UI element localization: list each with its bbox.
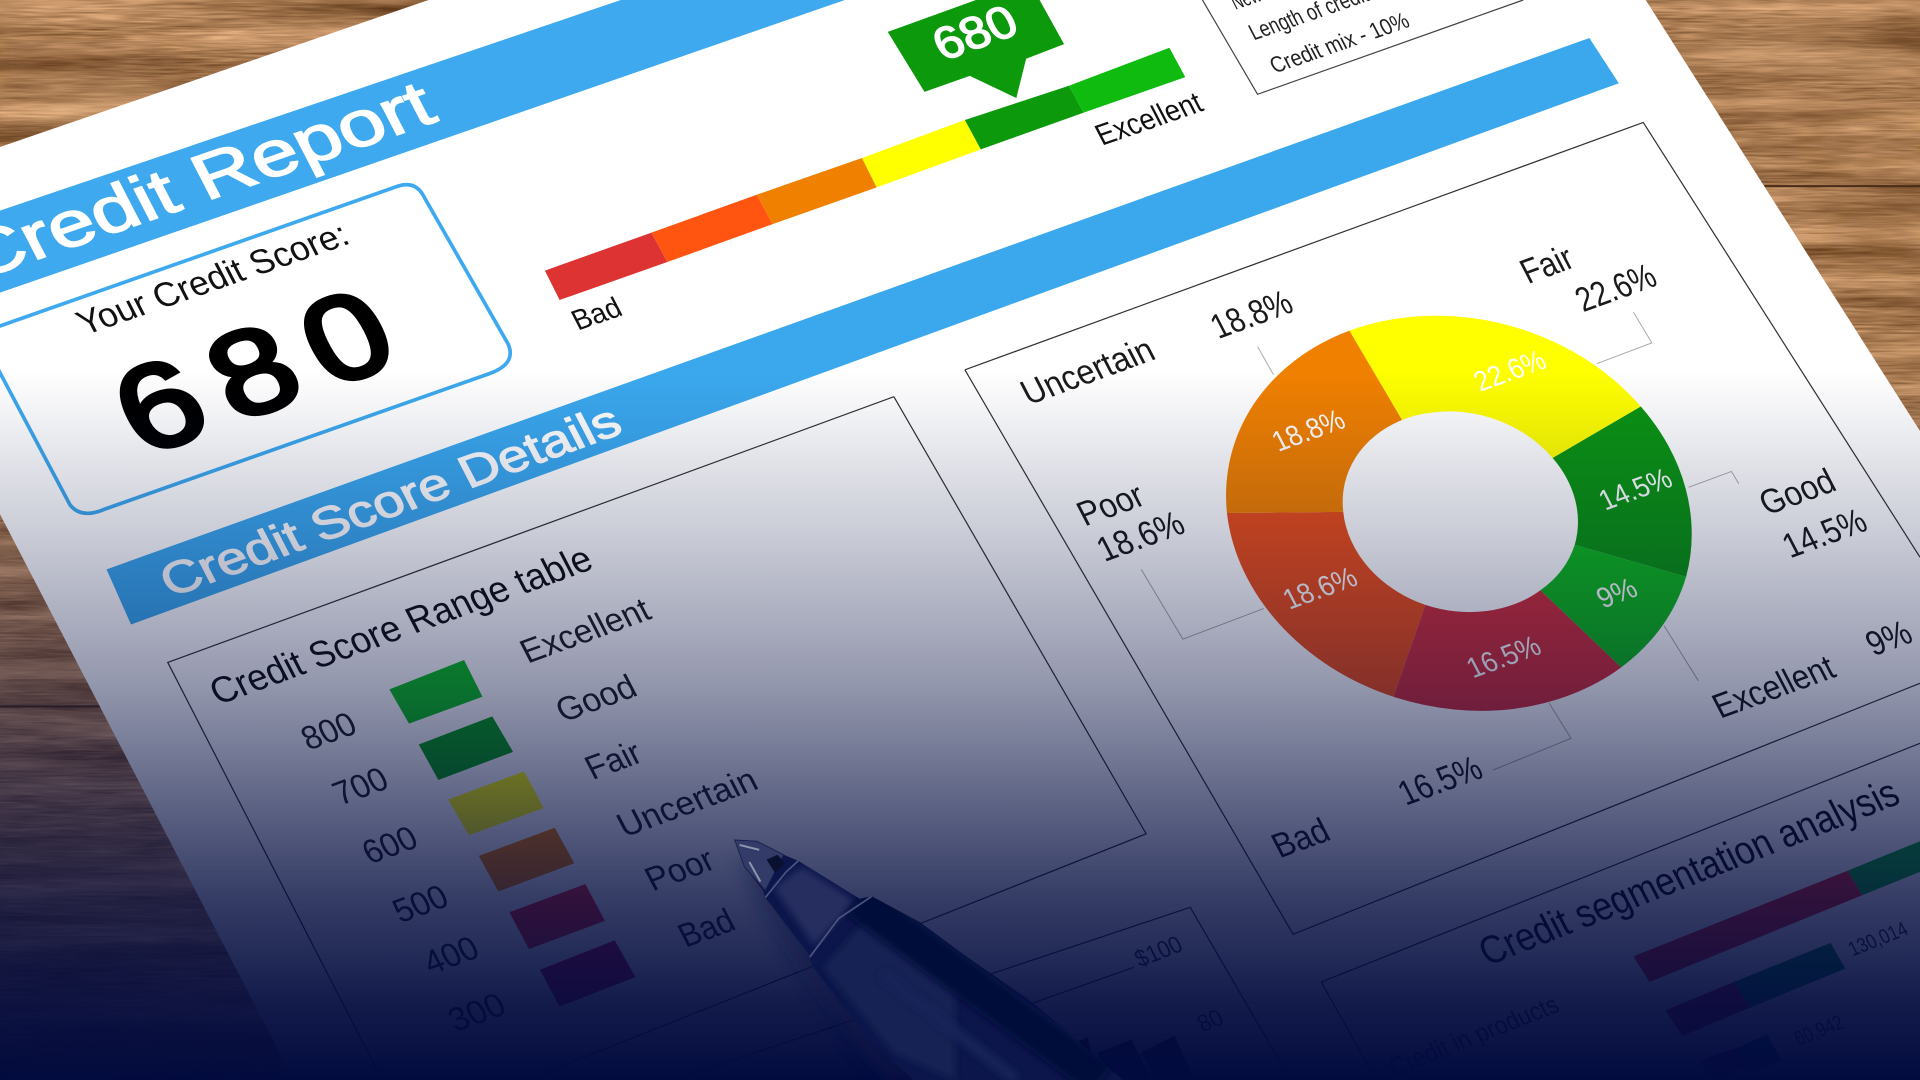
pen body [735,840,1123,1080]
row: 600 fair: Fair [579,734,648,787]
row: 400 poor: 400 [417,930,485,982]
gauge label: bad: Bad [566,291,627,337]
value 60,942: 60,942 [1791,1011,1848,1050]
panel: bar chart (partly hidden) [673,907,1291,1080]
panel: donut chart [965,122,1920,934]
donut outer labels: Poor [1070,475,1151,534]
donut outer labels: 18.8% [1204,283,1299,346]
panel: credit score range table [168,397,1146,1080]
row: 500 uncertain: 500 [387,878,455,930]
title band [0,0,845,294]
row: 800 excellent: 800 [295,706,363,758]
donut inner labels [1266,344,1678,685]
panel: credit segmentation analysis [1321,743,1920,1080]
row: 600 fair [356,734,648,872]
score pointer flag [888,0,1064,98]
panel: credit score box [0,185,510,513]
donut outer labels: Fair [1513,238,1580,291]
donut outer labels: 18.6% [1090,503,1191,569]
pen shading [765,861,1102,1080]
big score number: 680 [91,264,415,481]
table heading: Credit Score Range table [203,539,600,713]
donut inner labels: 18.8% [1266,404,1351,458]
factor: credit mix: Credit mix - 10% [1265,8,1414,78]
donut outer labels: 16.5% [1391,748,1489,813]
chart bars [1074,1036,1195,1080]
leader lines [1141,312,1739,770]
icon: pen [735,840,1123,1080]
donut outer labels: Good [1752,461,1842,523]
donut inner labels: 14.5% [1593,462,1678,517]
panel: score factors list [1202,0,1523,94]
donut segment: bad 16.5% [1393,590,1621,711]
donut inner labels: 22.6% [1468,344,1552,398]
donut outer labels: Bad [1265,811,1336,865]
donut segment: excellent 9% [1540,545,1686,667]
row: 700 good [327,668,643,813]
donut outer labels: Uncertain [1014,330,1161,412]
row label: credit in products: Credit in products [1385,991,1564,1080]
donut segment: good 14.5% [1553,407,1692,577]
row: 700 good: 700 [327,761,395,813]
donut inner labels: 16.5% [1461,630,1546,685]
donut outer labels: 14.5% [1775,501,1873,565]
label: your credit score: Your Credit Score: [70,215,355,343]
axis label: 80: 80 [1193,1005,1228,1038]
row: 700 good: Good [549,668,643,730]
donut inner labels: 18.6% [1277,561,1363,616]
gauge: score colour bar [545,48,1209,337]
axis label: $100: $100 [1130,931,1187,973]
row: 400 poor [417,841,721,982]
donut inner labels: 9% [1591,572,1643,615]
donut outer labels [1014,238,1919,865]
pen shadow [740,857,1102,1080]
donut segment: fair 22.6% [1349,316,1641,458]
row: 300 bad: Bad [672,902,741,955]
row: 800 excellent: Excellent [514,591,657,671]
stacked bars [1633,871,1862,982]
row: 300 bad: 300 [442,986,512,1039]
donut segment: poor 18.6% [1227,512,1425,697]
gauge label: excellent: Excellent [1090,86,1209,152]
row: 500 uncertain: Uncertain [611,761,764,845]
section heading: Credit Score Details [151,395,629,606]
donut outer labels: Excellent [1706,648,1842,726]
pen tip [735,840,785,890]
row: 400 poor: Poor [639,841,721,899]
donut outer labels: 22.6% [1569,256,1663,319]
row: 500 uncertain [387,761,764,930]
row: 800 excellent [295,591,657,758]
row: 300 bad [442,902,741,1039]
donut segment: uncertain 18.8% [1226,331,1402,513]
row: 600 fair: 600 [356,819,424,872]
